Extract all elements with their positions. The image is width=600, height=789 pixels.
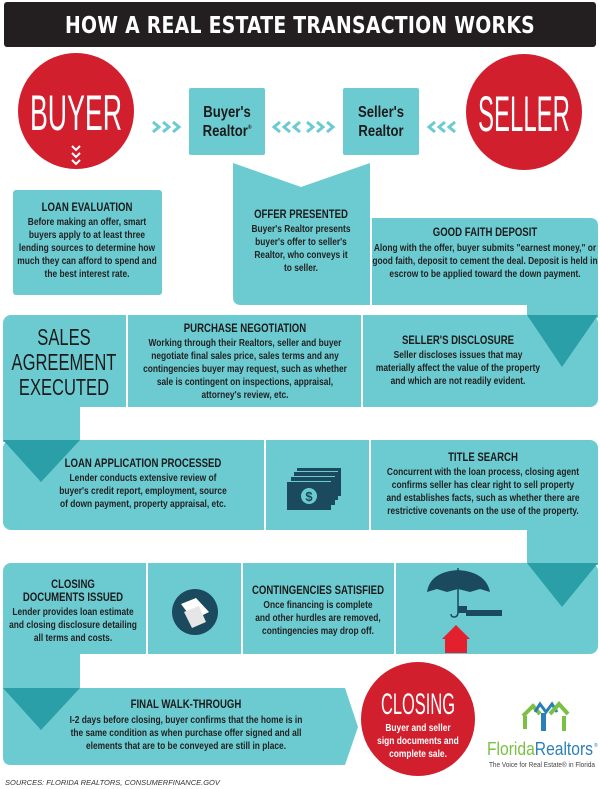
- panel: closing documents issued: DOCUMENTS ISSUED: [23, 591, 123, 604]
- panel: closing documents issued: Lender provides loan estimate: [12, 606, 134, 618]
- closing circle: complete sale.: [389, 748, 447, 760]
- icon: documents: [172, 589, 218, 635]
- panel: final walk-through arrow: I-2 days before closing, buyer confirms that the home is in: [70, 714, 303, 726]
- panel: good faith deposit: Along with the offer, buyer submits "earnest money," or: [374, 242, 596, 254]
- panel: title search: restrictive covenants on the use of the property.: [387, 505, 579, 517]
- panel: contingencies satisfied: CONTINGENCIES SATISFIED: [252, 584, 384, 597]
- panel: final walk-through arrow: [3, 688, 358, 765]
- panel: seller's disclosure: SELLER'S DISCLOSURE: [402, 334, 514, 347]
- panel: contingencies satisfied: [252, 584, 384, 637]
- panel: title search: and establishes facts, such as whether there are: [386, 492, 580, 504]
- panel: purchase negotiation: negotiate final sales price, sales terms and any: [151, 350, 339, 362]
- arrow: down triangle left 1: [3, 440, 80, 482]
- panel: good faith deposit: GOOD FAITH DEPOSIT: [433, 226, 538, 239]
- panel: seller's disclosure: and which are not readily evident.: [391, 375, 525, 387]
- sources: SOURCES: FLORIDA REALTORS, CONSUMERFINANCE.GOV: [5, 778, 221, 787]
- buyer's realtor box: Realtor: [203, 123, 248, 140]
- logo: florida realtors: FloridaRealtors: [487, 739, 593, 759]
- title bar: HOW A REAL ESTATE TRANSACTION WORKS: [65, 13, 535, 39]
- panel: loan evaluation: [13, 190, 162, 295]
- panel: loan application processed: LOAN APPLICATION PROCESSED: [65, 457, 221, 470]
- buyer's realtor box: Buyer's: [203, 104, 251, 121]
- panel: purchase negotiation: contingencies buyer may request, such as whether: [143, 363, 347, 375]
- arrows: chevrons: [153, 122, 455, 132]
- seller's realtor box: Realtor: [358, 123, 404, 140]
- panel: purchase negotiation: [143, 322, 347, 401]
- panel: offer presented: buyer's offer to seller's: [255, 236, 347, 248]
- panel: contingencies satisfied: Once financing is complete: [263, 599, 373, 611]
- heading: sales agreement executed: EXECUTED: [19, 375, 109, 401]
- title bar: [4, 2, 596, 47]
- buyer circle: [18, 53, 134, 169]
- panel: closing documents issued: [9, 578, 137, 644]
- row 2 band: [3, 315, 598, 442]
- panel: title search: Concurrent with the loan process, closing agent: [387, 466, 580, 478]
- heading: sales agreement executed: SALES: [37, 325, 91, 351]
- panel: offer presented: to seller.: [284, 262, 318, 274]
- panel: contingencies satisfied: and other hurdles are removed,: [255, 612, 381, 624]
- panel: closing documents issued: and closing disclosure detailing: [9, 619, 137, 631]
- panel: seller's disclosure: [376, 334, 541, 387]
- panel: purchase negotiation: sale is contingent on inspections, appraisal,: [157, 376, 333, 388]
- panel: loan evaluation: buyers apply to at least three: [29, 229, 145, 241]
- panel: closing documents issued: all terms and costs.: [34, 632, 112, 644]
- panel: loan application processed: Lender conducts extensive review of: [70, 472, 217, 484]
- panel: loan application processed: buyer's credit report, employment, source: [59, 485, 227, 497]
- panel: title search: TITLE SEARCH: [448, 451, 518, 464]
- arrow: down triangle right 1: [527, 315, 598, 367]
- buyer's realtor box: ®: [248, 124, 251, 131]
- closing circle: CLOSING: [381, 688, 455, 721]
- panel: seller's disclosure: Seller discloses issues that may: [394, 349, 523, 361]
- icon: money: $: [305, 489, 313, 504]
- seller's realtor box: Seller's: [358, 104, 404, 121]
- panel: contingencies satisfied: contingencies may drop off.: [262, 625, 374, 637]
- panel: loan evaluation: Before making an offer, smart: [28, 216, 147, 228]
- panel: good faith deposit: good faith, deposit to cement the deal. Deposit is held in: [372, 255, 598, 267]
- panel: final walk-through arrow: FINAL WALK-THROUGH: [131, 698, 241, 711]
- heading: sales agreement executed: [12, 325, 116, 401]
- panel: seller's disclosure: materially affect the value of the property: [376, 362, 541, 374]
- buyer circle: BUYER: [30, 85, 122, 141]
- seller circle: [466, 54, 582, 170]
- closing circle: sign documents and: [377, 735, 459, 747]
- panel: offer presented: [233, 163, 370, 305]
- panel: purchase negotiation: attorney's review, etc.: [201, 389, 289, 401]
- panel: final walk-through arrow: the same condition as when purchase offer signed and all: [71, 727, 301, 739]
- seller's realtor box: [343, 88, 419, 155]
- closing circle: [361, 662, 475, 776]
- panel: loan application processed: of down payment, property appraisal, etc.: [60, 498, 226, 510]
- buyer's realtor box: [189, 88, 265, 155]
- panel: final walk-through arrow: elements that are to be conveyed are still in place.: [86, 740, 286, 752]
- logo: florida realtors: ®: [594, 742, 598, 749]
- panel: offer presented: Buyer's Realtor presents: [251, 223, 351, 235]
- panel: offer presented: OFFER PRESENTED: [254, 208, 348, 221]
- logo: florida realtors: [487, 704, 598, 769]
- panel: title search: [386, 451, 580, 517]
- panel: good faith deposit: [372, 218, 598, 318]
- panel: purchase negotiation: PURCHASE NEGOTIATION: [184, 322, 306, 335]
- panel: purchase negotiation: Working through their Realtors, seller and buyer: [149, 337, 342, 349]
- panel: title search: confirms seller has clear right to sell property: [392, 479, 575, 491]
- panel: loan evaluation: the best interest rate.: [45, 268, 129, 280]
- panel: loan evaluation: LOAN EVALUATION: [42, 201, 133, 214]
- heading: sales agreement executed: AGREEMENT: [12, 350, 116, 376]
- panel: good faith deposit: escrow to be applied toward the down payment.: [389, 268, 581, 280]
- panel: loan evaluation: lending sources to determine how: [19, 242, 156, 254]
- row 4 band: [3, 563, 598, 690]
- panel: closing documents issued: CLOSING: [51, 578, 95, 591]
- icon: umbrella and house: [427, 568, 502, 653]
- arrow: down triangle right 2: [527, 563, 598, 607]
- icon: money: [287, 468, 341, 510]
- panel: loan evaluation: much they can afford to spend and: [17, 255, 157, 267]
- closing circle: Buyer and seller: [385, 722, 451, 734]
- panel: offer presented: Realtor, who conveys it: [254, 249, 348, 261]
- panel: loan application processed: [59, 457, 227, 510]
- row 3 band: [3, 440, 598, 565]
